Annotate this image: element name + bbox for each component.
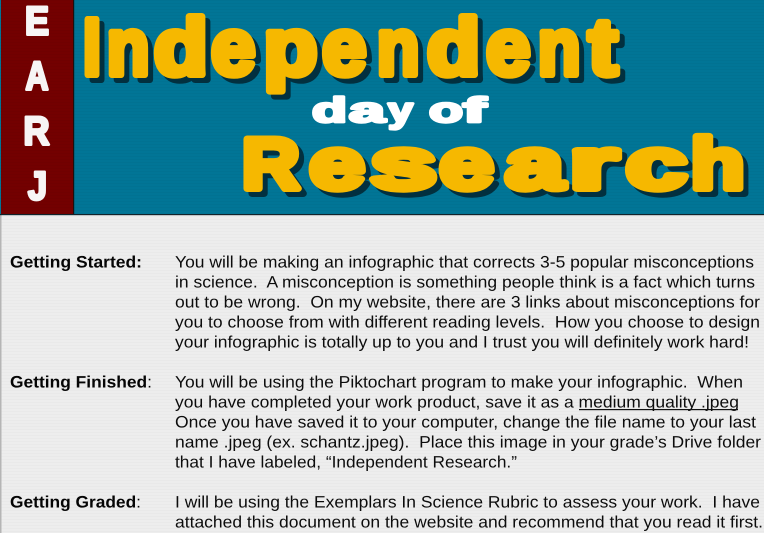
title: Independent: d	[154, 2, 208, 92]
title: Independent: t	[588, 2, 618, 92]
title: Independent: e	[327, 8, 371, 96]
title: Research: R	[242, 124, 300, 204]
title: Independent: e	[486, 2, 530, 92]
title: day of: f	[463, 91, 487, 130]
text block: Getting Started	[175, 252, 760, 352]
title: Independent: n	[382, 8, 424, 96]
title: Independent: p	[269, 8, 322, 96]
title: Research: e	[310, 124, 364, 204]
text block: Getting Started: your infographic is totally up to you and I trust you will definitely work hard!	[175, 332, 749, 352]
title: Research	[242, 124, 750, 210]
title: Research: a	[506, 124, 565, 204]
heading: Getting Graded: Getting Graded :	[10, 492, 141, 512]
title: Independent: e	[216, 8, 260, 96]
panel: blue banner background	[0, 0, 764, 215]
title: day of: y	[388, 91, 414, 130]
title: Independent: n	[112, 8, 154, 96]
section: Getting Finished	[10, 372, 761, 472]
title: Independent: n	[377, 2, 419, 92]
title: Independent: e	[322, 2, 366, 92]
title: Research: s	[370, 124, 436, 204]
text block: Getting Started: out to be wrong. On my website, there are 3 links about misconceptions for	[175, 292, 760, 312]
text block: Getting Finished: you have completed your work product, save it as a medium quality .jpeg	[175, 392, 739, 412]
title: Research: c	[626, 124, 687, 204]
title: Independent: I	[83, 2, 101, 92]
title: Independent: n	[538, 2, 580, 92]
text block: Getting Graded: attached this document on the website and recommend that you read it first.	[175, 512, 763, 532]
side letters EARJ: E	[25, 0, 49, 44]
title: day of: d	[312, 91, 347, 130]
title: Research: s	[376, 130, 442, 210]
title: Independent: n	[543, 8, 585, 96]
section: Getting Graded	[10, 492, 763, 532]
text block: Getting Finished: name .jpeg (ex. schantz.jpeg). Place this image in your grade’s Drive folder	[175, 432, 761, 452]
side letters EARJ	[24, 0, 50, 208]
title: day of: o	[429, 91, 463, 130]
title: Independent: d	[427, 2, 480, 92]
side letters EARJ: J	[28, 164, 47, 208]
text block: Getting Started: in science. A misconception is something people think is a fact which turns	[175, 272, 755, 292]
title: Independent: e	[491, 8, 535, 96]
title: Independent: d	[159, 8, 213, 96]
title: day of	[312, 91, 487, 130]
title: Research: e	[314, 130, 370, 210]
text block: Getting Finished	[175, 372, 761, 472]
title: Research: r	[570, 124, 618, 204]
title: Research: h	[691, 124, 745, 204]
title: Independent: d	[432, 8, 485, 96]
side letters EARJ: A	[26, 54, 48, 98]
side letters EARJ: R	[24, 110, 50, 154]
title: Independent: n	[107, 2, 149, 92]
title: Research: c	[631, 130, 692, 210]
title: Independent: p	[264, 2, 317, 92]
title: Research: h	[696, 130, 750, 210]
title: Research: e	[444, 130, 498, 210]
text block: Getting Started: you to choose from with different reading levels. How you choose to design	[175, 312, 760, 332]
title: day of: a	[349, 91, 386, 130]
text block: Getting Graded	[175, 492, 763, 532]
title: Research: e	[440, 124, 494, 204]
title: Independent: I	[88, 8, 106, 96]
text block: Getting Finished: Once you have saved it to your computer, change the file name to your last	[175, 412, 756, 432]
text block: Getting Started: You will be making an infographic that corrects 3-5 popular misconceptions	[175, 252, 754, 272]
title: Independent: e	[211, 2, 255, 92]
title: Independent	[83, 2, 622, 96]
text block: Getting Finished: that I have labeled, “Independent Research.”	[175, 452, 517, 472]
header banner	[0, 0, 764, 215]
heading: Getting Finished: Getting Finished :	[10, 372, 152, 392]
section: Getting Started	[10, 252, 760, 352]
title: Research: r	[574, 130, 623, 210]
text block: Getting Finished: You will be using the Piktochart program to make your infographic. When	[175, 372, 743, 392]
title: Independent: t	[594, 8, 622, 96]
heading: Getting Started: Getting Started:	[10, 252, 142, 272]
panel: maroon side strip	[1, 0, 74, 214]
title: Research: a	[510, 130, 570, 210]
title: Research: R	[247, 130, 305, 210]
text block: Getting Graded: I will be using the Exemplars In Science Rubric to assess your work. I have	[175, 492, 760, 512]
